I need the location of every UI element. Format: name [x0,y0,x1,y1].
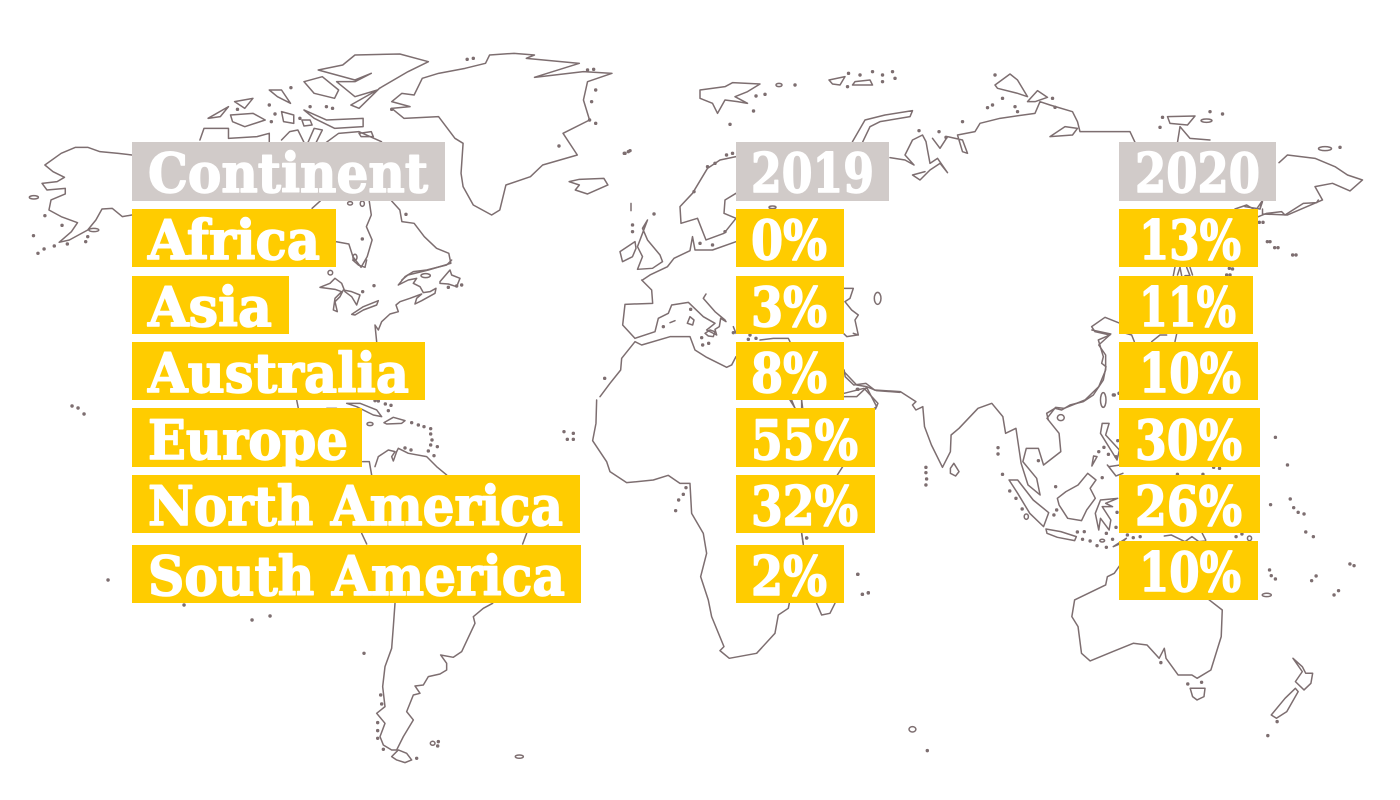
value 2020 Australia: 10% [1139,341,1241,405]
label: Africa: Africa [147,208,320,272]
value 2020 South America: 10% [1139,540,1241,604]
continent column [132,208,581,608]
value 2019 Europe: 55% [751,408,858,472]
label: North America: North America [148,474,563,538]
map: East Africa fragments and Indian Ocean islands [802,467,868,594]
2020 column [1119,208,1260,604]
table header row [132,141,1276,205]
header: 2019: 2019 [751,141,874,205]
value 2019 Asia: 3% [751,275,827,339]
label: Asia: Asia [147,275,272,339]
label: Europe: Europe [148,408,348,472]
map: Great Lakes, US east coast and Caribbean [297,260,462,475]
value 2019 South America: 2% [751,544,827,608]
header: 2020: 2020 [1135,141,1260,205]
value 2020 North America: 26% [1135,474,1242,538]
value 2019 Africa: 0% [751,208,827,272]
value 2019 Australia: 8% [751,341,827,405]
map: Alaska, Arctic Canada and Greenland [29,53,628,280]
map: small islands west [72,406,270,620]
map: Europe and Russia [620,72,1362,280]
map: Mediterranean and Middle East [600,280,900,408]
header: Continent: Continent [148,141,428,205]
2019 column [736,208,875,608]
map: South America and West Africa [362,400,835,763]
value 2020 Europe: 30% [1135,408,1242,472]
label: Australia: Australia [147,341,409,405]
value 2019 North America: 32% [751,474,858,538]
map: East Asia and Kamchatka [1047,200,1318,420]
value 2020 Asia: 11% [1139,275,1236,339]
label: South America: South America [148,544,565,608]
map: South Asia, Southeast Asia, Australia and New Zealand [840,330,1354,751]
value 2020 Africa: 13% [1139,208,1241,272]
